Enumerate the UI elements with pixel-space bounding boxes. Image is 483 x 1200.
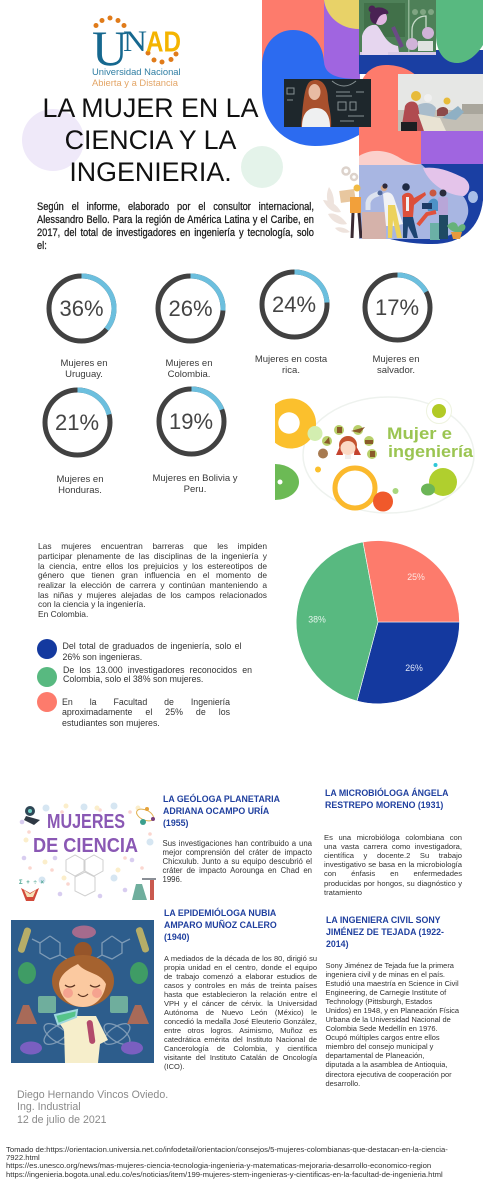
icon: planets — [135, 807, 155, 825]
title — [43, 93, 258, 187]
shape: green rounded block — [436, 0, 483, 63]
figure: microscope on desk — [362, 190, 386, 239]
body: civil engineer: miembro del consejo municipal y — [326, 1042, 433, 1051]
ring — [42, 388, 112, 458]
slice: 25% coral — [363, 541, 460, 622]
girl pigtails — [336, 444, 361, 455]
decorative circle: mint — [241, 146, 283, 188]
body: epidemiologist: hasta que establecieron la relación entre el — [164, 990, 317, 999]
body: epidemiologist: casos y controles en más de treinta países — [164, 981, 317, 990]
body: civil engineer: Estudió una maestría en Science in Civil — [326, 979, 459, 988]
value 26%: 26% — [405, 663, 423, 673]
girl with engineering ideas — [318, 425, 377, 459]
shape: coral block — [262, 0, 324, 66]
body: geologist: Sus investigaciones han contribuido a una — [162, 838, 312, 848]
logo name: Universidad Nacional — [92, 66, 181, 77]
body: epidemiologist: de trabajo comenzó a elaborar estudios de — [164, 972, 317, 981]
donut hole — [278, 412, 300, 434]
body: microbiologist — [324, 832, 462, 897]
paragraph: barriers: participar plenamente de las disciplinas de la ingeniería y — [38, 551, 267, 561]
legend text: researchers: De los 13.000 investigadores reconocidos en — [63, 664, 252, 674]
graphic subtitle: ingeniería — [388, 442, 474, 461]
shape: pale oval — [468, 191, 478, 203]
heading: microbiologist — [325, 788, 448, 810]
icon: lab flasks — [132, 878, 156, 900]
face — [59, 964, 106, 1007]
body: epidemiologist: Cancerología de Colombia, y científica — [164, 1044, 317, 1053]
body: civil engineer: directora ejecutiva de cooperación por — [326, 1070, 452, 1079]
body: civil engineer: departamental de Planeación, — [326, 1051, 424, 1060]
heading MUJERES: MUJERES — [47, 811, 125, 833]
body: civil engineer: Ocupó múltiples cargos entre ellos — [326, 1033, 440, 1042]
photo: woman at blackboard — [284, 79, 371, 127]
body: civil engineer: Colombia Sede Medellín en 1976. — [326, 1024, 438, 1033]
references: https://ingenieria.bogota.unal.edu.co/es/noticias/item/199-mujeres-stem-ingenieras-y-cientificas-en-la-facultad-de-ingenieria.html — [6, 1170, 443, 1179]
icon: math symbols: Σ+÷× — [19, 880, 44, 886]
ring — [46, 274, 116, 344]
small green dot — [392, 488, 398, 494]
paragraph: barriers — [38, 541, 268, 619]
figure: seated woman with laptop — [418, 190, 440, 240]
donut: Bolivia y Peru 19% — [156, 386, 226, 456]
heading: geologist: (1955) — [163, 818, 188, 828]
value: 17% — [375, 294, 419, 320]
green half circle — [275, 464, 299, 500]
molecule lines — [32, 936, 133, 1048]
ring — [362, 272, 432, 342]
body: civil engineer: Engineering, de Carnegie Institute of — [326, 988, 446, 997]
body: civil engineer: diputada a la asamblea de Antioquia, — [326, 1060, 448, 1069]
figure: engineer with plan — [339, 184, 361, 238]
heading: geologist: LA GEÓLOGA PLANETARIA — [163, 794, 280, 804]
label: Uruguay: Mujeres en — [60, 358, 108, 369]
girl hair and face — [339, 436, 357, 454]
figure: woman in red jacket — [402, 183, 426, 238]
body: civil engineer — [326, 961, 459, 1088]
heading: civil engineer: JIMÉNEZ DE TEJADA (1922- — [326, 927, 444, 937]
legend text: students: estudiantes son mujeres. — [62, 718, 160, 728]
label: Bolivia y Peru: Peru. — [184, 484, 206, 495]
paragraph: barriers: la ciencia, entre ellos los prejuicios y los estereotipos de — [38, 560, 267, 570]
yellow small dot — [315, 466, 321, 472]
body: epidemiologist: entre otros logros. Asimismo, Muñoz es — [164, 1026, 317, 1035]
icon: gears — [342, 168, 357, 180]
references — [6, 1146, 448, 1179]
legend text: graduates: Del total de graduados de ingeniería, solo el — [62, 640, 242, 650]
shape: yellow quarter — [324, 0, 359, 29]
label: Colombia: Colombia. — [168, 369, 210, 380]
heading: geologist — [163, 794, 280, 828]
head — [52, 955, 114, 1007]
beakers — [38, 996, 128, 1013]
legend text: students — [62, 696, 230, 728]
icon: math symbols — [19, 880, 44, 901]
body: epidemiologist: (ICO). — [164, 1062, 184, 1071]
legend text: students: En la Facultad de Ingeniería — [62, 696, 230, 706]
figure: doctor in white coat — [381, 183, 403, 238]
label: Honduras: Mujeres en — [56, 474, 104, 484]
legend dot: coral — [37, 692, 57, 712]
legend text: researchers — [63, 664, 252, 684]
heading DE CIENCIA: DE CIENCIA — [33, 835, 138, 857]
body: microbiologist: una vasta carrera como investigadora, — [324, 842, 462, 851]
heading: microbiologist: RESTREPO MORENO (1931) — [325, 800, 443, 810]
heading: epidemiologist: LA EPIDEMIÓLOGA NUBIA — [164, 908, 276, 918]
small white dot — [278, 480, 282, 484]
paragraph: barriers: las niñas y mujeres alejadas de los campos relacionados — [38, 590, 267, 600]
slice: 38% green — [296, 542, 378, 701]
yellow donut — [275, 398, 316, 448]
body: geologist: mejor comprensión del cráter de impacto — [162, 848, 312, 856]
photo: scientist with microscope — [359, 0, 436, 55]
label: Colombia — [166, 358, 212, 380]
value: 36% — [59, 296, 104, 321]
cyan dot — [434, 463, 438, 467]
body: microbiologist: Es una microbióloga colombiana con — [324, 832, 462, 842]
body: epidemiologist: visitante del Instituto Catalán de Oncología — [164, 1053, 317, 1062]
body: geologist: 1996. — [162, 874, 182, 884]
decorative circle: lavender — [22, 109, 84, 171]
intro text — [36, 200, 314, 252]
body: civil engineer: Technology (Pittsburgh, Estados — [326, 997, 432, 1006]
legend dot: green — [37, 667, 57, 687]
body: civil engineer: Unidos) en 1948, y en Planeación Física — [326, 1006, 459, 1015]
lab coat — [56, 1016, 108, 1063]
body: geologist: cráter de impacto Aorounga en Chad en — [162, 866, 312, 874]
legend text: graduates — [62, 640, 242, 662]
body: epidemiologist: propia unidad en el centro, donde el equipo — [164, 963, 317, 972]
hexagon worksheet — [66, 855, 103, 896]
donut: Uruguay 36% — [46, 274, 116, 344]
heading: civil engineer: 2014) — [326, 939, 348, 949]
illustration: team of scientists — [339, 183, 465, 240]
graphic: Mujer e ingenieria — [275, 396, 474, 514]
intro text: el: — [37, 240, 47, 252]
body: epidemiologist: VPH y el cáncer de cérvix. la Universidad — [164, 999, 317, 1008]
microbes — [18, 926, 148, 1054]
value 25%: 25% — [407, 572, 425, 582]
value 38%: 38% — [308, 614, 326, 624]
donut: El Salvador 17% — [362, 272, 432, 342]
heading: epidemiologist: AMPARO MUÑOZ CALERO — [164, 920, 277, 930]
title: LA MUJER EN LA — [43, 93, 258, 123]
icon: potted plant — [447, 222, 465, 239]
intro text: Según el informe, elaborado por el consultor internacional, — [37, 200, 314, 212]
value: 26% — [168, 296, 213, 321]
author block: 12 de julio de 2021 — [17, 1114, 107, 1126]
flask in hand — [55, 1010, 77, 1024]
body: geologist — [162, 838, 312, 884]
pale green circle — [308, 426, 322, 441]
body: civil engineer: Urbana de la Universidad Nacional de — [326, 1015, 451, 1024]
intro text: Alessandro Bello. Para la región de América Latina y el Caribe, en — [37, 214, 314, 226]
donut: Costa Rica 24% — [260, 270, 330, 340]
graphic title: Mujer e — [387, 424, 452, 443]
references: 7922.html — [6, 1153, 40, 1162]
label: Bolivia y Peru: Mujeres en Bolivia y — [152, 473, 238, 484]
label: Costa Rica: rica. — [282, 365, 300, 376]
slice: 26% blue — [357, 622, 460, 704]
legend text: graduates: 26% son ingenieras. — [62, 652, 142, 662]
image: Mujeres de ciencia — [19, 802, 156, 901]
heading: epidemiologist: (1940) — [164, 932, 189, 942]
test tube in hand — [86, 1020, 96, 1044]
body: geologist: Chicxulub. Junto a su equipo descubrió el — [162, 856, 312, 866]
body: civil engineer: desarrollo. — [326, 1079, 360, 1088]
idea bubbles — [318, 425, 377, 459]
paragraph: barriers: Las mujeres encuentran barreras que les impiden — [38, 541, 267, 551]
body: civil engineer: Sony Jiménez de Tejada fue la primera — [326, 961, 454, 970]
paragraph: barriers: género que tienen gran influencia en el momento de — [38, 570, 267, 580]
heading: epidemiologist — [164, 908, 277, 942]
hero collage — [262, 0, 483, 244]
heading: microbiologist: LA MICROBIÓLOGA ÁNGELA — [325, 788, 448, 798]
legend text: students: aproximadamente el 25% de los — [62, 707, 230, 717]
orange circle — [373, 492, 393, 512]
label: Honduras — [56, 474, 104, 496]
paragraph: barriers: En Colombia. — [38, 609, 88, 619]
shape: dark blue band — [359, 50, 483, 74]
body: epidemiologist: concedió la medalla José Eleuterio González, — [164, 1017, 317, 1026]
pie chart — [296, 540, 460, 704]
value: 19% — [169, 409, 213, 434]
logo mark — [92, 16, 181, 68]
body: epidemiologist: Autónoma de Nuevo León (México) le — [164, 1008, 317, 1017]
paragraph: barriers: realizar la elección de carrera y continúan manteniendo a — [38, 580, 267, 590]
ring — [260, 270, 330, 340]
title: CIENCIA Y LA — [65, 125, 236, 155]
legend text: researchers: Colombia, solo el 38% son mujeres. — [63, 674, 203, 684]
illustration: scientist girl — [11, 920, 154, 1063]
body: microbiologist: con énfasis en enfermedades — [324, 869, 462, 878]
dotted pastel background — [16, 800, 158, 904]
donut: Colombia 26% — [156, 274, 226, 344]
logo letters AD: AD — [146, 26, 181, 58]
body: epidemiologist: A mediados de la década de los 80, dirigió su — [164, 954, 317, 962]
test tubes — [17, 926, 150, 954]
icon: leaves — [323, 187, 350, 233]
shape: pink blob — [423, 168, 469, 196]
cheeks — [63, 988, 73, 998]
label: Costa Rica: Mujeres en costa — [255, 354, 327, 365]
top right lime circle — [426, 398, 452, 424]
photo: engineers on site — [398, 74, 483, 131]
body: epidemiologist: catedrática emérita del Instituto Nacional de — [164, 1035, 317, 1044]
background — [11, 920, 154, 1063]
pale ellipse outline — [303, 397, 474, 513]
author block: Diego Hernando Vincos Oviedo. — [17, 1088, 168, 1100]
label: El Salvador: Mujeres en — [372, 354, 420, 365]
label: Costa Rica — [255, 354, 328, 376]
shape: dark blue curve — [380, 164, 483, 244]
ring — [156, 274, 226, 344]
label: Colombia: Mujeres en — [166, 358, 212, 369]
heading: civil engineer: LA INGENIERA CIVIL SONY — [326, 915, 441, 925]
body: microbiologist: investigativo se basa en la microbiología — [324, 860, 462, 869]
title: INGENIERIA. — [69, 157, 232, 187]
logo: UNAD — [92, 16, 181, 88]
label: Bolivia y Peru — [152, 473, 238, 495]
shape: purple block — [421, 131, 483, 201]
paragraph: barriers: con la ciencia y la ingeniería. — [38, 599, 146, 609]
logo tagline: Abierta y a Distancia — [92, 76, 178, 88]
body: microbiologist: producidas por hongos, su diagnóstico y — [324, 879, 462, 888]
shape: pale pink wave — [359, 151, 421, 165]
donut: Honduras 21% — [42, 388, 112, 458]
icon: astronaut — [24, 806, 40, 825]
references: Tomado de:https://orientacion.universia.net.co/infodetail/orientacion/consejos/5-mujeres-colombianas-que-destacan-en-la-ciencia- — [6, 1144, 448, 1154]
body: microbiologist: científica y docente.2 Su trabajo — [324, 851, 462, 860]
references: https://es.unesco.org/news/mas-mujeres-ciencia-tecnologia-ingenieria-y-matematicas-mejoraria-desarrollo-economico-region — [6, 1161, 431, 1170]
logo dots — [94, 16, 178, 64]
body: civil engineer: ingeniera civil y de minas en el país. — [326, 970, 445, 979]
author block: Ing. Industrial — [17, 1101, 81, 1113]
logo letter N: N — [123, 25, 147, 58]
body: epidemiologist — [164, 954, 318, 1071]
label: El Salvador: salvador. — [377, 365, 415, 376]
heading: geologist: ADRIANA OCAMPO URÍA — [163, 806, 269, 816]
ring — [156, 386, 226, 456]
body: microbiologist: tratamiento — [324, 888, 362, 897]
eyes and smile — [65, 985, 100, 996]
label: El Salvador — [372, 354, 420, 376]
legend dot: blue — [37, 639, 57, 659]
author block — [17, 1088, 168, 1126]
heading: civil engineer — [326, 915, 444, 949]
lime circle — [429, 468, 457, 496]
girl figure — [52, 942, 114, 1063]
value: 24% — [272, 292, 316, 316]
green circle — [421, 484, 435, 496]
shape: periwinkle panel — [359, 164, 468, 239]
label: Uruguay: Uruguay. — [65, 369, 103, 380]
label: Honduras: Honduras. — [58, 485, 102, 496]
shape: coral arch — [359, 65, 421, 165]
value: 21% — [55, 410, 99, 435]
hair bun — [74, 942, 92, 960]
figure: man in lilac shirt — [438, 190, 448, 239]
intro text: 2017, del total de investigadores en ingeniería y tecnología, solo — [37, 226, 314, 238]
yellow ring — [335, 468, 375, 508]
flasks — [16, 1005, 149, 1024]
shape: purple column — [324, 0, 360, 80]
shape: bright blue blob — [262, 30, 359, 146]
label: Uruguay — [60, 358, 108, 380]
